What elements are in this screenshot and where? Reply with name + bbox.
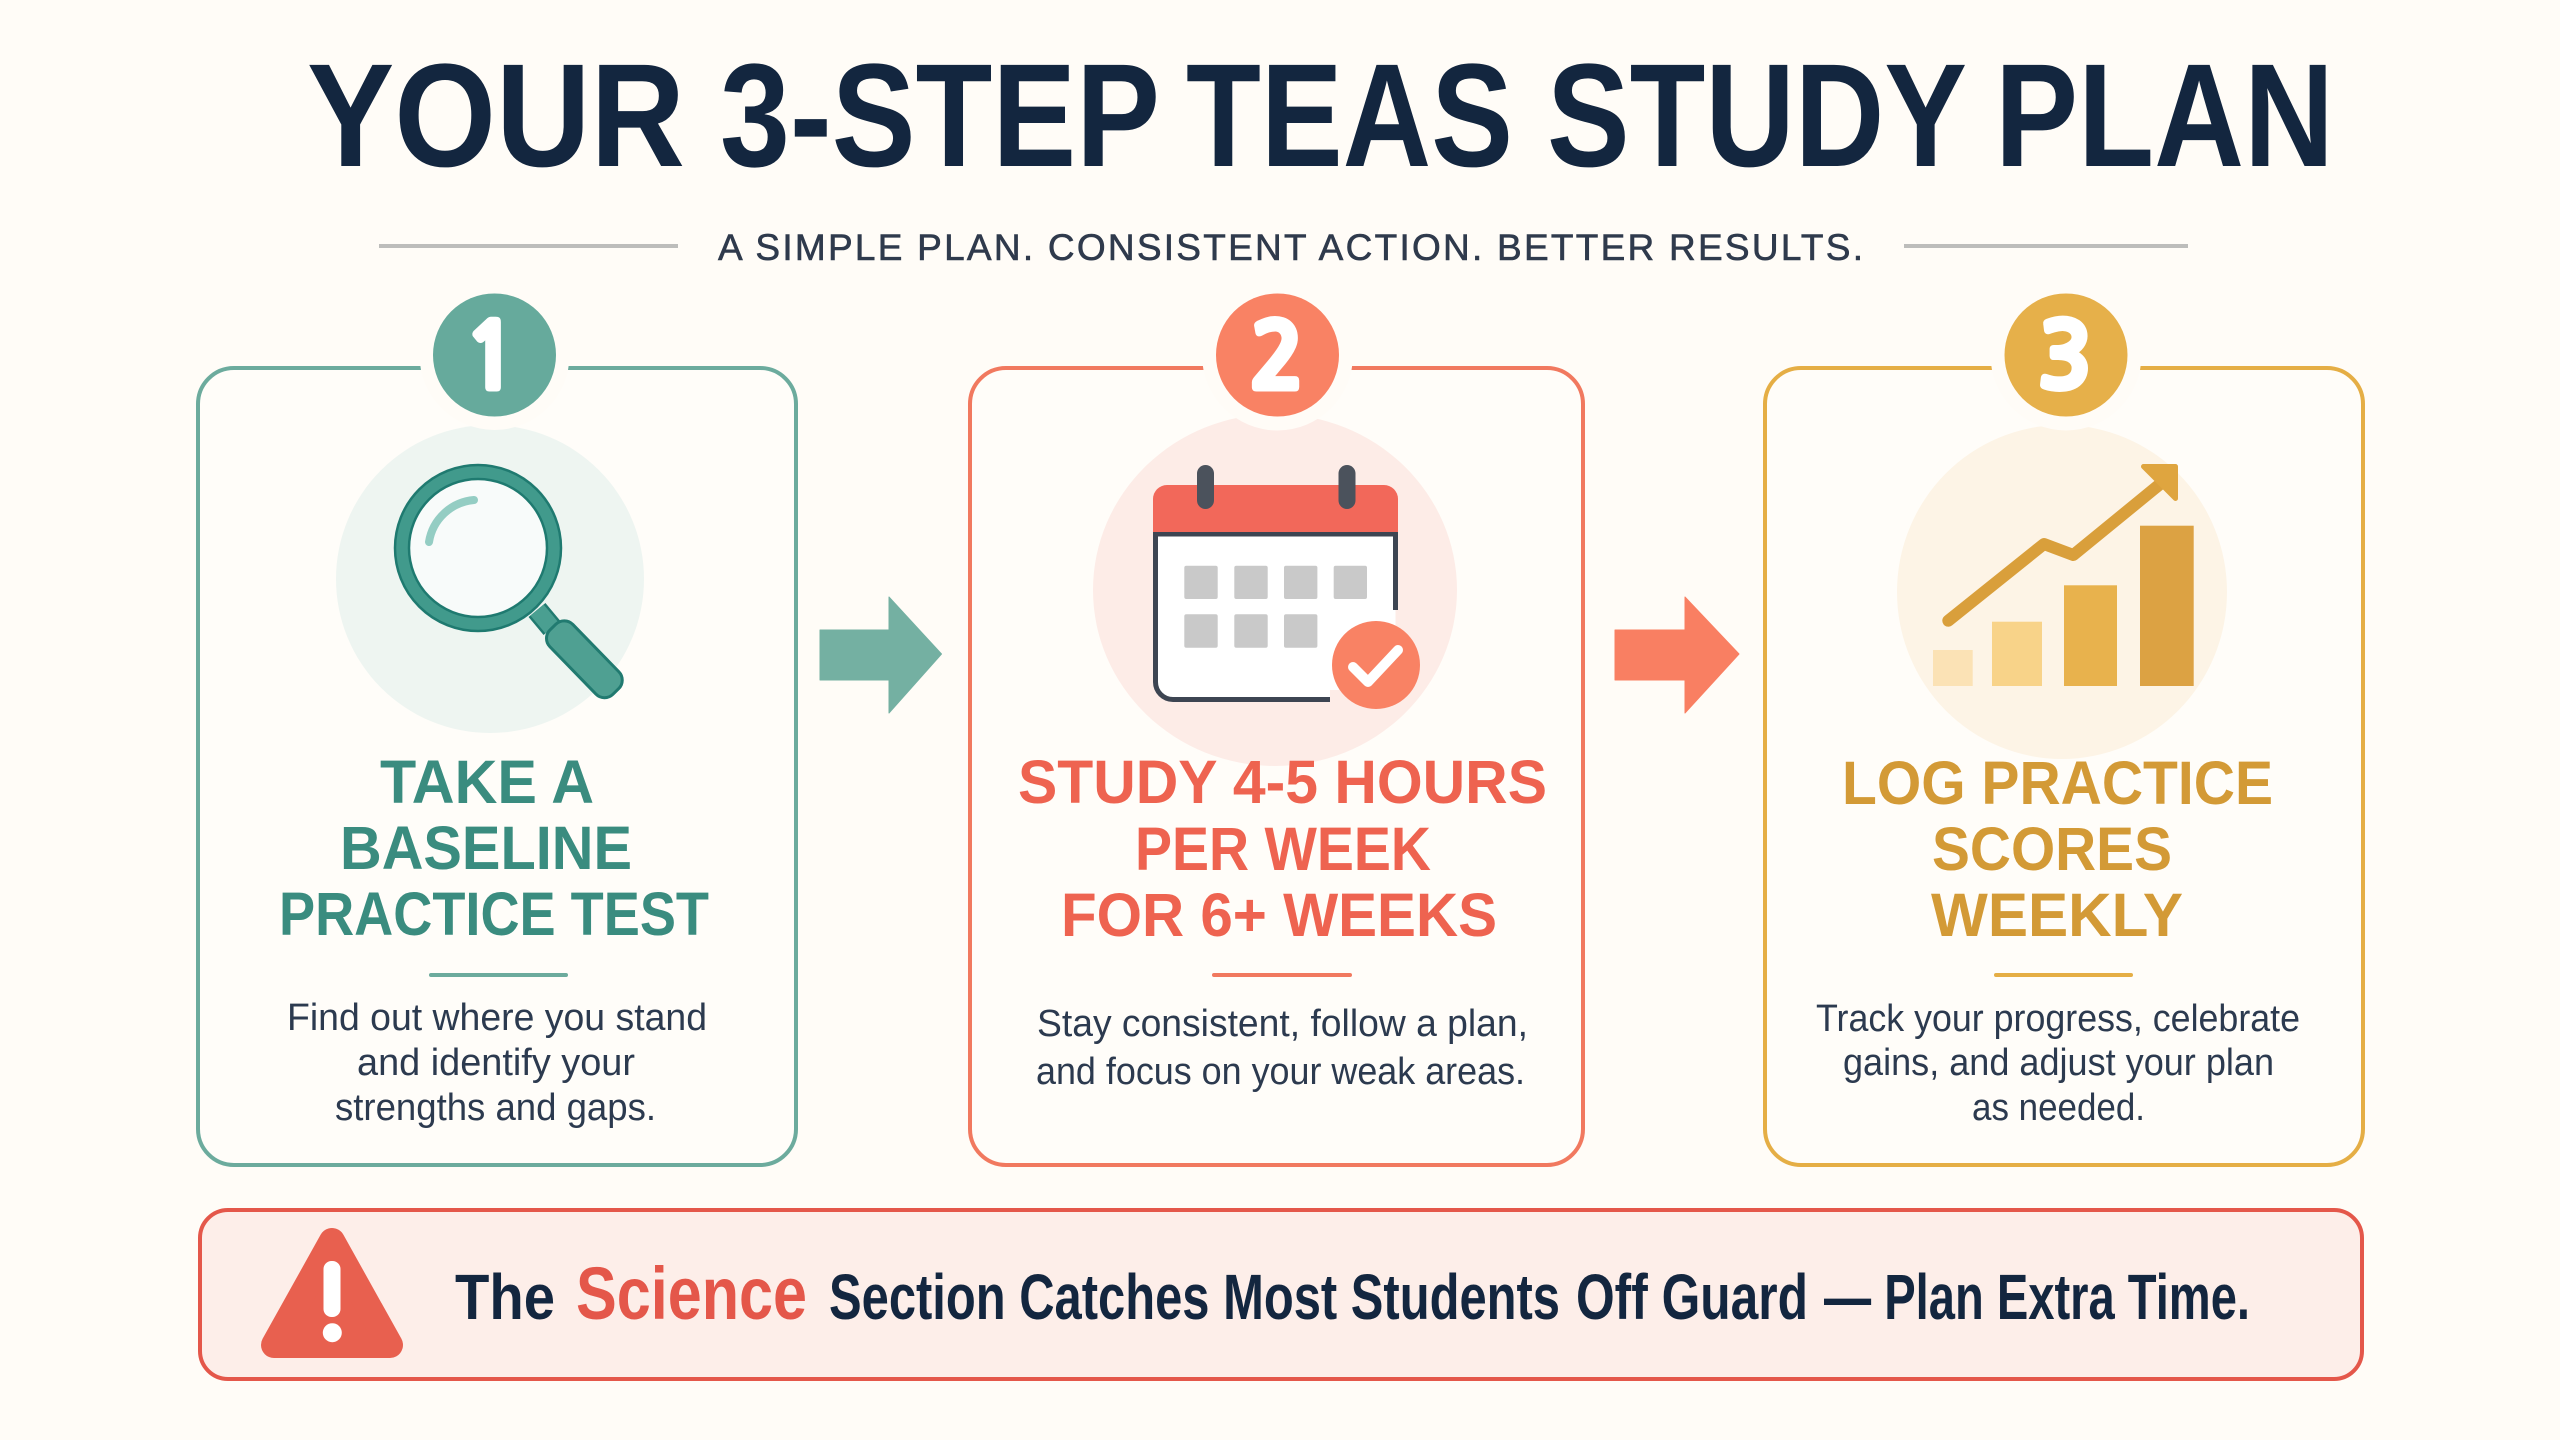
- callout text: Section Catches Most Students: [829, 1261, 1560, 1333]
- callout banner: [200, 1210, 2362, 1379]
- step 2 description: Stay consistent, follow a plan,: [1037, 1003, 1528, 1045]
- step 1 description: strengths and gaps.: [335, 1087, 656, 1129]
- step 1 heading: [279, 748, 709, 948]
- step 3 number badge: 3: [2038, 313, 2092, 402]
- step 3 description: Track your progress, celebrate: [1816, 998, 2300, 1040]
- step 2 number badge: 2: [1250, 313, 1304, 402]
- panel: step 3: [1765, 280, 2363, 1165]
- arrow: step 2 to step 3: [1615, 597, 1739, 713]
- title: YOUR: [307, 34, 685, 198]
- title: [307, 34, 2334, 198]
- panel: step 2: [970, 280, 1583, 1165]
- callout text: [455, 1252, 2250, 1335]
- step 3 description: gains, and adjust your plan: [1843, 1042, 2274, 1084]
- callout text: Off Guard: [1576, 1261, 1808, 1333]
- step 1 heading: BASELINE: [340, 814, 632, 882]
- title: 3-STEP: [720, 34, 1160, 198]
- callout text: The: [455, 1261, 555, 1333]
- arrow: step 1 to step 2: [820, 597, 942, 713]
- callout text: Science: [576, 1252, 807, 1335]
- step 3 heading: SCORES: [1932, 815, 2172, 883]
- callout text: — Plan Extra Time.: [1824, 1261, 2250, 1333]
- icon: warning triangle: [274, 1241, 390, 1345]
- title: PLAN: [1995, 34, 2334, 198]
- panel: step 1: [198, 280, 796, 1165]
- step 1 number badge: [433, 294, 556, 416]
- title: STUDY: [1547, 34, 1967, 198]
- title: TEAS: [1186, 34, 1513, 198]
- step 2 heading: PER WEEK: [1135, 815, 1431, 883]
- step 3 heading: [1842, 749, 2273, 949]
- step 2 heading: FOR 6+ WEEKS: [1061, 881, 1497, 949]
- subtitle with side rules: [379, 227, 2188, 268]
- step 3 heading: LOG PRACTICE: [1842, 749, 2273, 817]
- step 1 description: and identify your: [357, 1042, 635, 1084]
- step 3 number badge: [2004, 294, 2128, 416]
- step 1 number badge: 1: [464, 313, 518, 402]
- step 2 heading: [1018, 748, 1547, 949]
- step 1 heading: TAKE A: [380, 748, 594, 816]
- step 1 heading: PRACTICE TEST: [279, 880, 709, 948]
- icon: rising bar chart: [1933, 466, 2194, 686]
- step 2 number badge: [1216, 294, 1339, 416]
- step 3 description: as needed.: [1972, 1087, 2145, 1129]
- step 1 description: Find out where you stand: [287, 997, 707, 1039]
- step 2 description: and focus on your weak areas.: [1036, 1051, 1525, 1093]
- subtitle with side rules: A SIMPLE PLAN. CONSISTENT ACTION. BETTER RESULTS.: [718, 227, 1863, 268]
- icon: calendar with check: [1153, 465, 1420, 709]
- step 2 heading: STUDY 4-5 HOURS: [1018, 748, 1547, 816]
- step 1 description: [287, 997, 707, 1129]
- icon: magnifying glass: [402, 472, 627, 703]
- step 3 description: [1816, 998, 2300, 1129]
- step 3 heading: WEEKLY: [1931, 881, 2183, 949]
- step 2 description: [1036, 1003, 1528, 1093]
